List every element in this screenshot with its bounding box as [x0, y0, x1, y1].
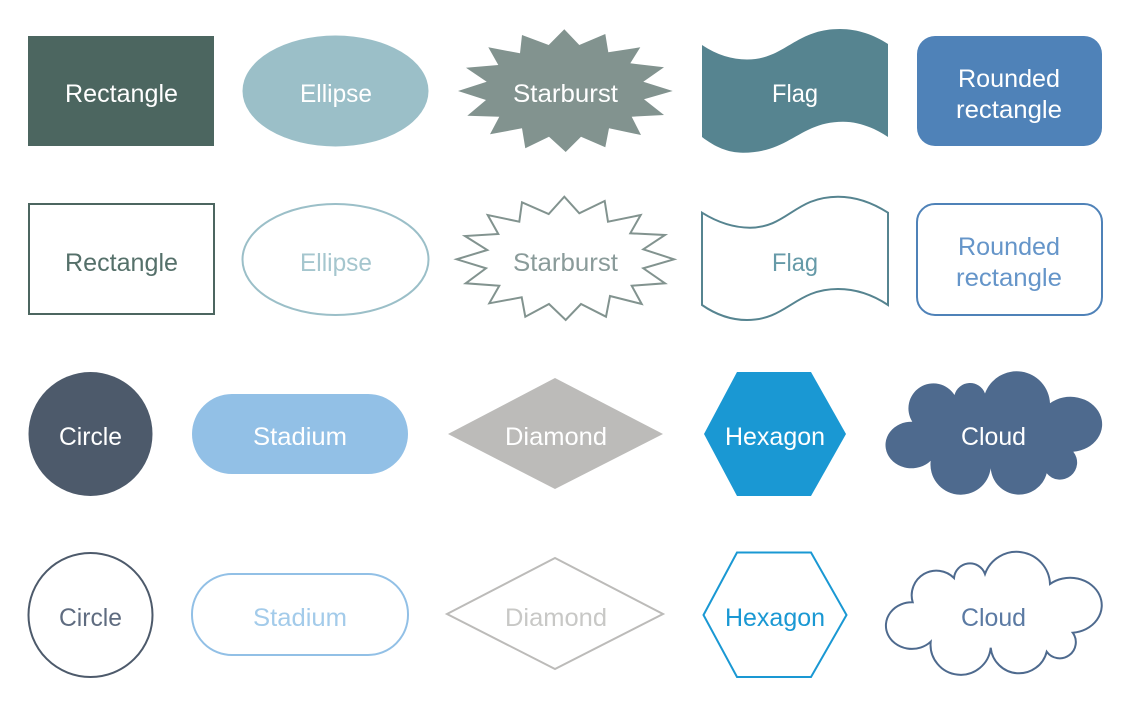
- outlined hexagon: [704, 552, 846, 677]
- filled starburst: [458, 29, 673, 152]
- filled stadium: Stadium: [253, 423, 347, 451]
- filled rectangle: Rectangle: [65, 80, 178, 108]
- filled cloud: [885, 371, 1102, 495]
- outlined rounded rectangle: rectangle: [956, 264, 1062, 292]
- filled flag: Flag: [772, 80, 818, 108]
- outlined flag: [702, 197, 888, 320]
- outlined ellipse: Ellipse: [300, 249, 372, 277]
- filled hexagon: [704, 372, 846, 496]
- filled diamond: [448, 378, 663, 489]
- outlined rounded rectangle: [917, 204, 1102, 315]
- filled hexagon: Hexagon: [725, 423, 825, 451]
- outlined rectangle: Rectangle: [65, 249, 178, 277]
- outlined cloud: Cloud: [961, 604, 1026, 632]
- outlined circle: [28, 553, 152, 677]
- outlined rectangle: [29, 204, 214, 314]
- filled circle: Circle: [59, 423, 122, 451]
- outlined circle: Circle: [59, 604, 122, 632]
- outlined hexagon: Hexagon: [725, 604, 825, 632]
- filled ellipse: Ellipse: [300, 80, 372, 108]
- outlined rounded rectangle: Rounded: [958, 233, 1060, 261]
- filled rectangle: [28, 36, 214, 146]
- filled flag: [702, 29, 888, 153]
- filled circle: [28, 372, 152, 496]
- outlined starburst: Starburst: [513, 249, 618, 277]
- outlined starburst: [457, 197, 674, 320]
- filled ellipse: [242, 36, 428, 146]
- outlined cloud: [886, 552, 1102, 675]
- filled rounded rectangle: [917, 36, 1102, 146]
- outlined diamond: [447, 558, 663, 669]
- filled diamond: Diamond: [505, 423, 607, 451]
- filled stadium: [192, 394, 408, 474]
- outlined stadium: [192, 574, 408, 655]
- outlined flag: Flag: [772, 249, 818, 277]
- outlined stadium: Stadium: [253, 604, 347, 632]
- outlined ellipse: [242, 204, 428, 315]
- filled rounded rectangle: rectangle: [956, 96, 1062, 124]
- outlined diamond: Diamond: [505, 604, 607, 632]
- filled rounded rectangle: Rounded: [958, 65, 1060, 93]
- filled cloud: Cloud: [961, 423, 1026, 451]
- filled starburst: Starburst: [513, 80, 618, 108]
